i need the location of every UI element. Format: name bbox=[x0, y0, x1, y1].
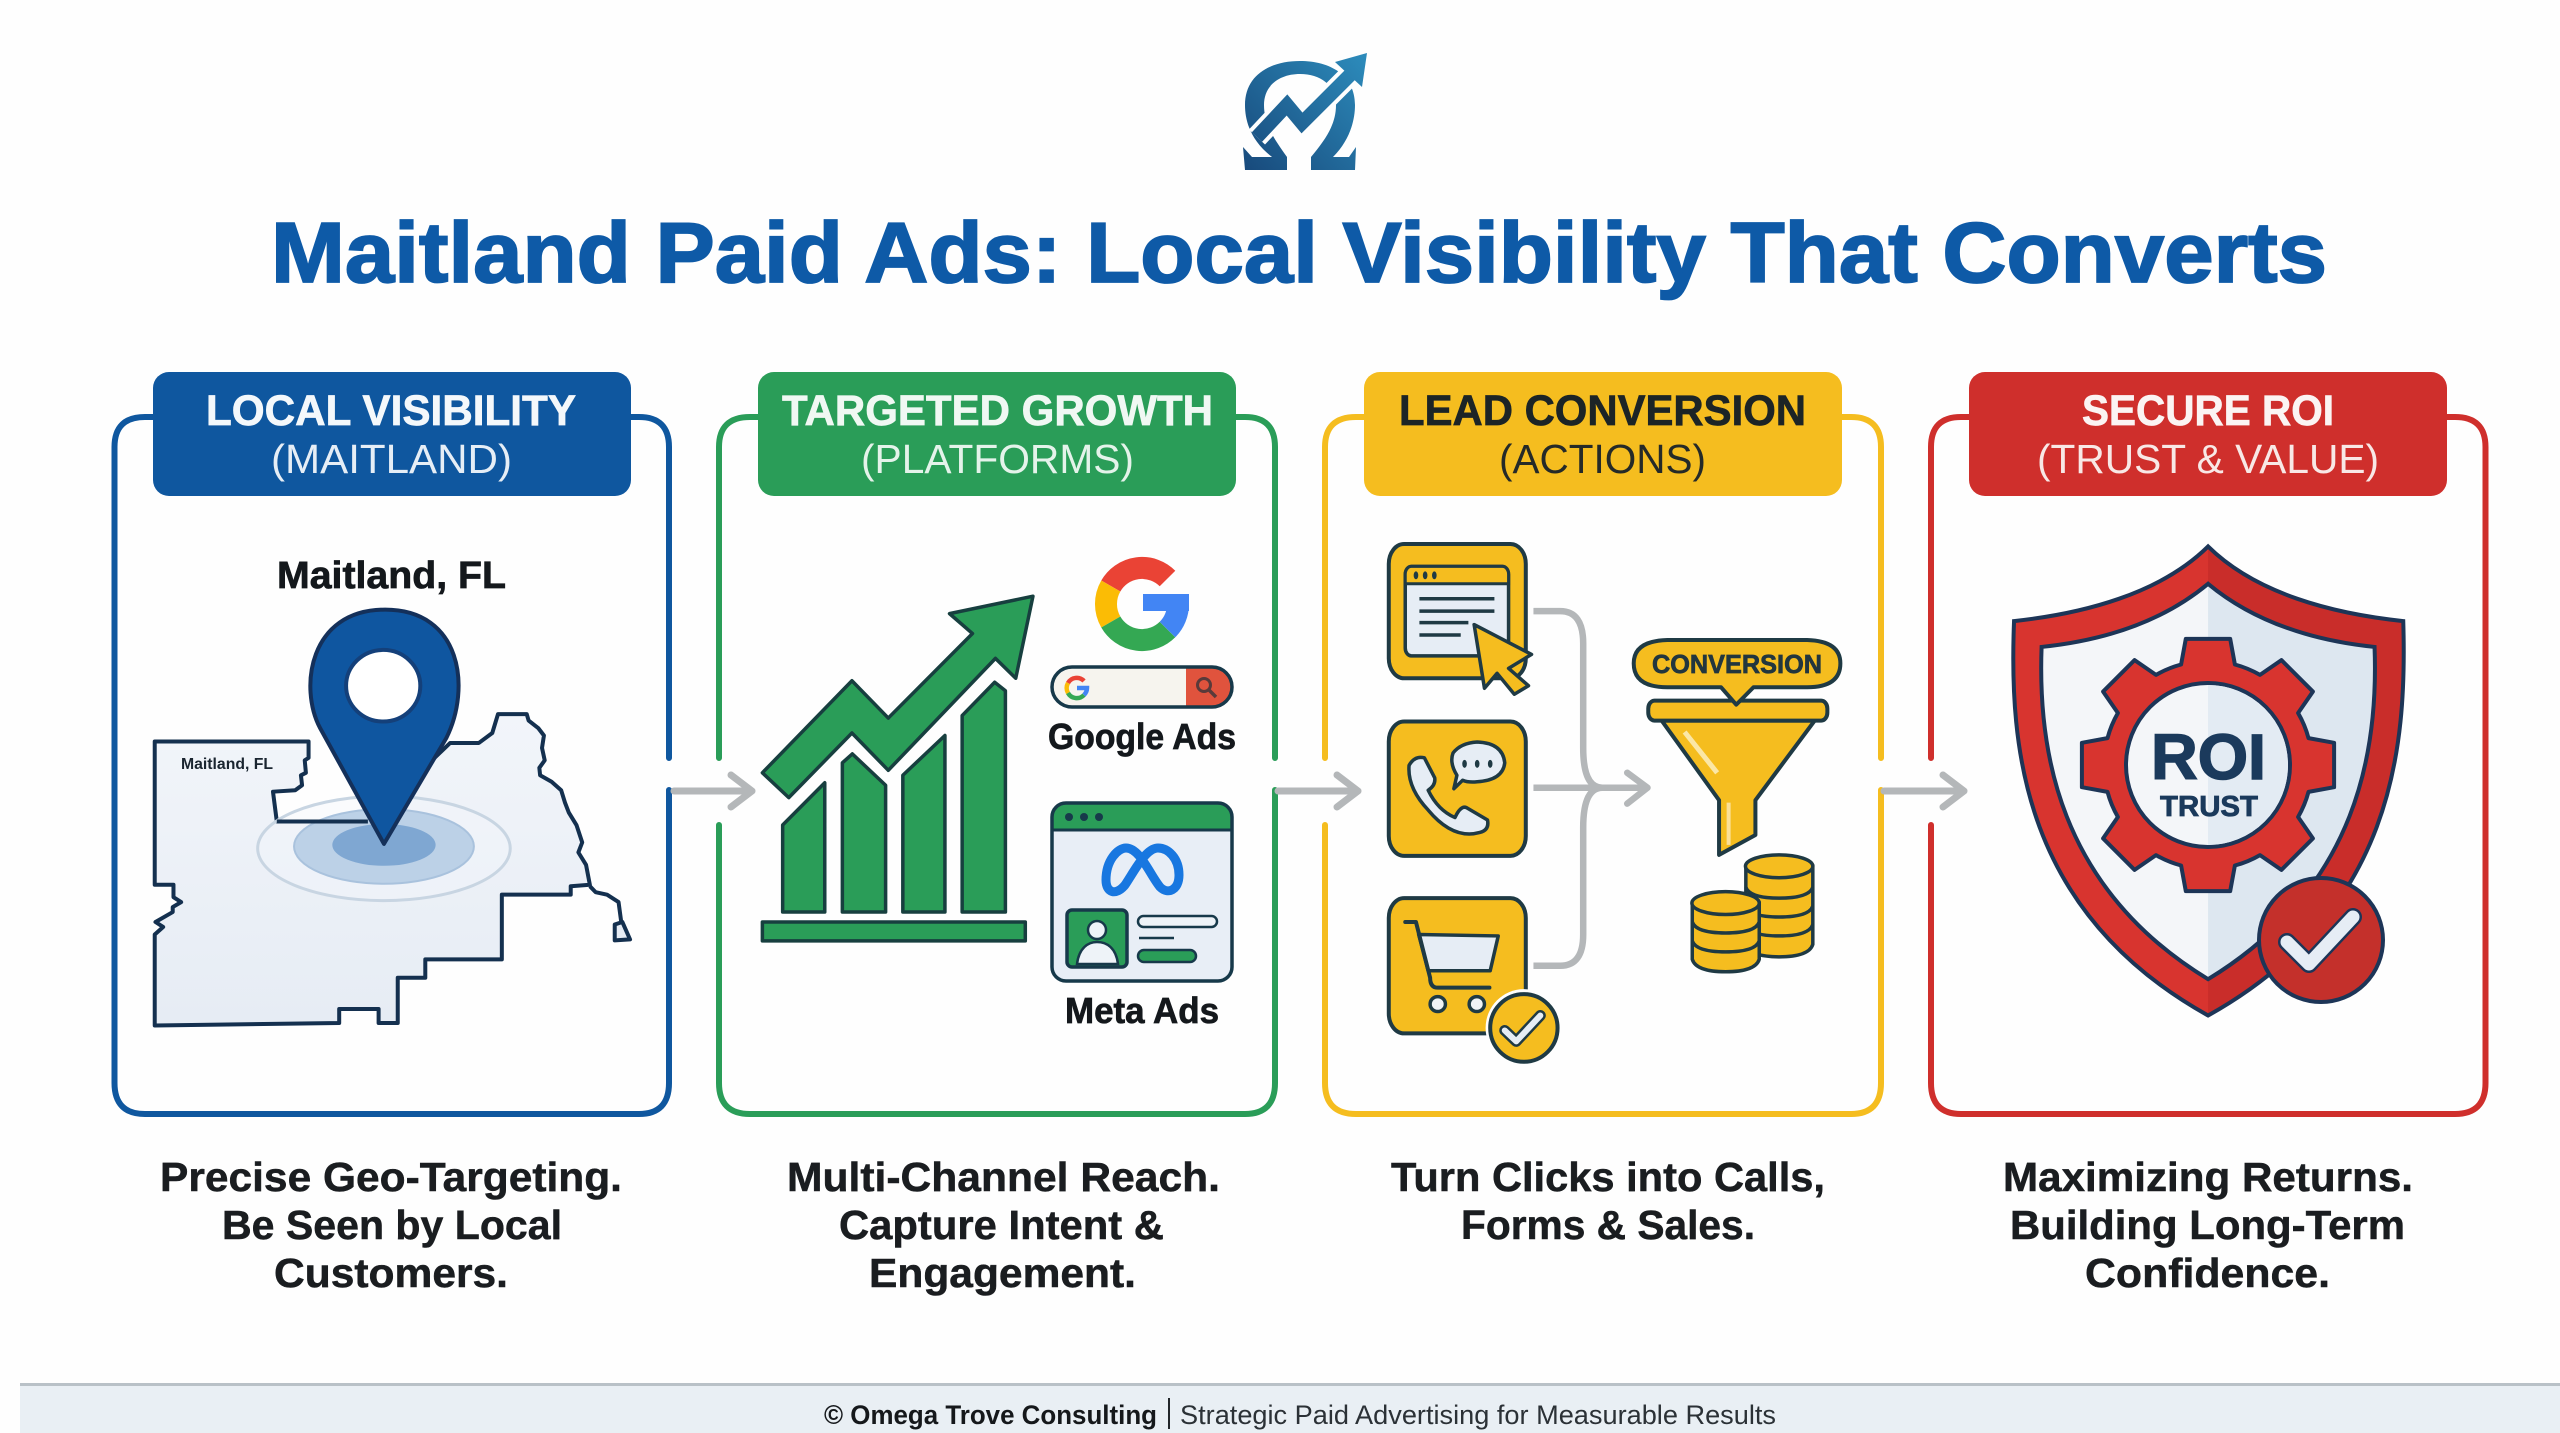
growth bar chart with arrow bbox=[762, 596, 1033, 941]
panel heading: SECURE ROI bbox=[2082, 387, 2334, 435]
arrow: growth to conversion bbox=[1278, 775, 1358, 807]
arrow: visibility to growth bbox=[674, 775, 752, 807]
icon: omega trove logo bbox=[1243, 53, 1367, 170]
location label: Maitland, FL bbox=[277, 555, 506, 597]
panel heading: (ACTIONS) bbox=[1499, 436, 1706, 482]
icon: gear with ROI trust: TRUST bbox=[2160, 791, 2258, 823]
panel frame bbox=[114, 417, 669, 1114]
text: geo targeting description: Precise Geo-Targeting. bbox=[160, 1154, 622, 1200]
panel heading: TARGETED GROWTH bbox=[782, 387, 1213, 435]
icon: meta ad window bbox=[1052, 803, 1232, 981]
panel: secure ROI bbox=[1931, 372, 2486, 1114]
text: geo targeting description: Customers. bbox=[274, 1250, 508, 1296]
text: ROI description bbox=[2003, 1154, 2413, 1296]
text: conversion description: Forms & Sales. bbox=[1461, 1202, 1755, 1248]
icon: web form click tile bbox=[1389, 544, 1532, 694]
panel heading: (MAITLAND) bbox=[271, 436, 512, 482]
text: multi-channel description: Engagement. bbox=[869, 1250, 1136, 1296]
panel: lead conversion bbox=[1325, 372, 1881, 1114]
panel heading bbox=[1364, 372, 1842, 496]
footer: © Omega Trove Consulting bbox=[824, 1400, 1157, 1430]
map of Maitland area with pin bbox=[155, 610, 630, 1025]
icon: google G bbox=[1106, 568, 1189, 640]
panel heading bbox=[1969, 372, 2447, 496]
text: multi-channel description: Capture Intent & bbox=[839, 1202, 1164, 1248]
text: conversion description: Turn Clicks into Calls, bbox=[1391, 1154, 1825, 1200]
arrow: conversion to ROI bbox=[1884, 775, 1964, 807]
panel: local visibility bbox=[114, 372, 669, 1114]
panel frame bbox=[719, 417, 1275, 1114]
text: geo targeting description bbox=[160, 1154, 622, 1296]
icon: phone call tile bbox=[1389, 722, 1526, 856]
icon: coin stacks bbox=[1692, 855, 1813, 972]
footer: Strategic Paid Advertising for Measurable Results bbox=[1180, 1400, 1776, 1430]
icon: gear with ROI trust bbox=[2082, 639, 2334, 891]
text: ROI description: Confidence. bbox=[2085, 1250, 2330, 1296]
text: geo targeting description: Be Seen by Local bbox=[222, 1202, 562, 1248]
meta ads label: Meta Ads bbox=[1065, 990, 1219, 1031]
panel heading: (PLATFORMS) bbox=[861, 436, 1134, 482]
footer bbox=[20, 1383, 2560, 1433]
panel heading: LEAD CONVERSION bbox=[1399, 387, 1806, 435]
connector arrows to funnel bbox=[1533, 611, 1647, 966]
icon: gear with ROI trust: ROI bbox=[2151, 721, 2266, 793]
google search bar bbox=[1052, 667, 1232, 707]
text: ROI description: Maximizing Returns. bbox=[2003, 1154, 2413, 1200]
text: multi-channel description: Multi-Channel Reach. bbox=[787, 1154, 1220, 1200]
panel: targeted growth bbox=[719, 372, 1275, 1114]
icon: shield bbox=[2013, 546, 2404, 1016]
panel heading: (TRUST & VALUE) bbox=[2037, 436, 2379, 482]
panel heading bbox=[153, 372, 631, 496]
icon: conversion funnel: CONVERSION bbox=[1652, 649, 1822, 679]
panel heading bbox=[758, 372, 1236, 496]
google ads label: Google Ads bbox=[1048, 716, 1236, 757]
panel frame bbox=[1931, 417, 2486, 1114]
panel frame bbox=[1325, 417, 1881, 1114]
text: multi-channel description bbox=[787, 1154, 1220, 1296]
text: conversion description bbox=[1391, 1154, 1825, 1248]
panel heading: LOCAL VISIBILITY bbox=[206, 387, 576, 435]
icon: conversion funnel bbox=[1634, 640, 1840, 855]
icon: shopping cart tile bbox=[1389, 898, 1562, 1067]
icon: check badge bbox=[2259, 878, 2383, 1002]
map label: Maitland, FL bbox=[181, 756, 273, 773]
title: Maitland Paid Ads: Local Visibility That Converts bbox=[271, 206, 2327, 301]
text: ROI description: Building Long-Term bbox=[2010, 1202, 2405, 1248]
